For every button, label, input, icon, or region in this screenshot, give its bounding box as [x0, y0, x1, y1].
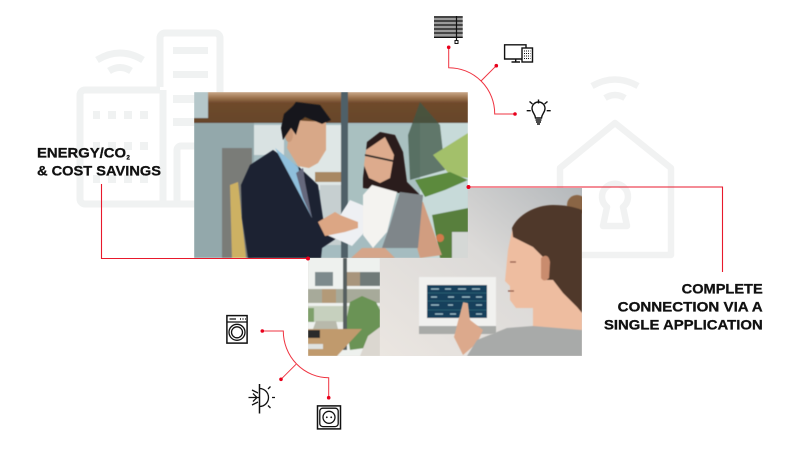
connector: bottom device branches — [260, 329, 331, 400]
connector: photo to complete connection — [466, 185, 722, 272]
woman — [454, 195, 587, 356]
icon: computer and keypad — [505, 45, 532, 62]
icon: window blinds — [434, 16, 463, 44]
woman — [351, 132, 442, 258]
heading: complete connection via a single application: CONNECTION VIA A — [618, 299, 763, 315]
man — [240, 102, 364, 258]
icon: faint connected house background — [560, 80, 671, 255]
heading: complete connection via a single application — [604, 280, 763, 332]
connector: energy savings to photo — [102, 184, 310, 260]
heading: energy and cost savings: 2 — [126, 155, 130, 161]
heading: complete connection via a single application: COMPLETE — [682, 280, 763, 296]
connector: top device branches — [447, 46, 517, 116]
building interior and garden view — [308, 258, 380, 356]
photo: business man and woman with tablet — [194, 92, 468, 258]
heading: energy and cost savings: ENERGY/CO — [37, 144, 126, 160]
heading: complete connection via a single application: SINGLE APPLICATION — [604, 316, 763, 332]
icon: sun and cooling control — [248, 384, 275, 414]
icon: faint connected building background — [80, 33, 220, 204]
heading: energy and cost savings — [37, 144, 161, 179]
icon: light bulb — [527, 100, 551, 124]
icon: washing machine — [227, 316, 247, 343]
icon: wall socket — [318, 406, 340, 429]
photo: woman using wall touch panel — [308, 188, 587, 356]
touch panel — [419, 277, 496, 334]
heading: energy and cost savings: & COST SAVINGS — [37, 163, 161, 179]
